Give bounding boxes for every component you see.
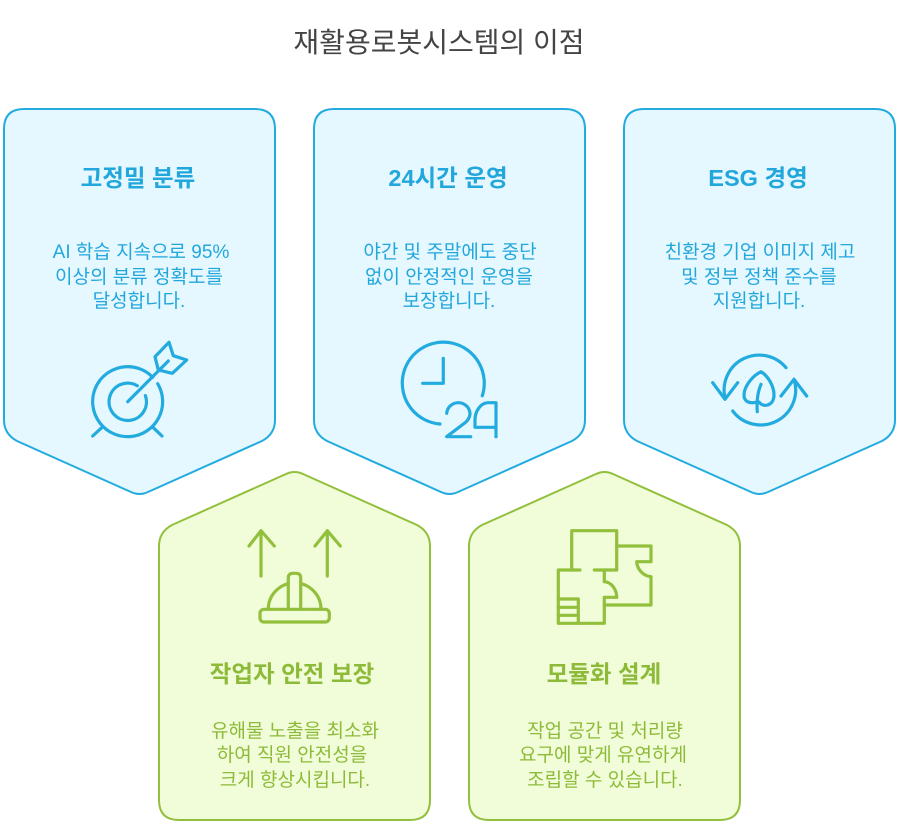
- text block: 고정밀 분류 설명: [53, 241, 229, 312]
- text block: ESG 경영 설명: [665, 241, 855, 312]
- text block: ESG 경영 설명: 친환경 기업 이미지 제고: [665, 241, 855, 263]
- title: 재활용로봇시스템의 이점: [293, 27, 585, 58]
- panel: 작업자 안전 보장: [159, 472, 430, 820]
- text block: 고정밀 분류 설명: AI 학습 지속으로 95%: [53, 241, 229, 263]
- panel: 24시간 운영: [314, 109, 585, 494]
- icon: leaf with cycle arrows: [713, 355, 807, 425]
- text block: ESG 경영 설명: 및 정부 정책 준수를: [681, 266, 837, 288]
- icon: clock with 24: [402, 342, 496, 437]
- text block: 작업자 안전 보장 설명: 유해물 노출을 최소화: [211, 720, 379, 742]
- heading: 고정밀 분류: 고정밀 분류: [81, 165, 195, 191]
- panel: ESG 경영: [624, 109, 895, 494]
- heading: 24시간 운영: 24시간 운영: [388, 165, 508, 191]
- panel: 모듈화 설계: [469, 472, 740, 820]
- text block: 24시간 운영 설명: [363, 241, 537, 312]
- text block: 작업자 안전 보장 설명: 크게 향상시킵니다.: [220, 769, 370, 791]
- text block: 24시간 운영 설명: 보장합니다.: [403, 290, 495, 312]
- text block: 작업자 안전 보장 설명: 하여 직원 안전성을: [217, 744, 367, 766]
- heading: ESG 경영: ESG 경영: [708, 165, 808, 191]
- text block: 모듈화 설계 설명: 작업 공간 및 처리량: [527, 720, 683, 742]
- text block: 고정밀 분류 설명: 달성합니다.: [93, 290, 185, 312]
- text block: 고정밀 분류 설명: 이상의 분류 정확도를: [55, 266, 223, 288]
- icon: target with arrow: [93, 342, 187, 437]
- text block: 모듈화 설계 설명: 조립할 수 있습니다.: [527, 769, 683, 791]
- heading: 작업자 안전 보장: 작업자 안전 보장: [210, 661, 374, 687]
- text block: 24시간 운영 설명: 없이 안정적인 운영을: [365, 266, 533, 288]
- text block: 작업자 안전 보장 설명: [211, 720, 379, 791]
- text block: ESG 경영 설명: 지원합니다.: [713, 290, 805, 312]
- text block: 모듈화 설계 설명: [519, 720, 687, 791]
- icon: helmet with up arrows: [249, 531, 340, 622]
- heading: 모듈화 설계: 모듈화 설계: [547, 661, 661, 687]
- text block: 모듈화 설계 설명: 요구에 맞게 유연하게: [519, 744, 687, 766]
- panel: 고정밀 분류: [4, 109, 275, 494]
- icon: floor plan: [558, 531, 651, 623]
- text block: 24시간 운영 설명: 야간 및 주말에도 중단: [363, 241, 537, 263]
